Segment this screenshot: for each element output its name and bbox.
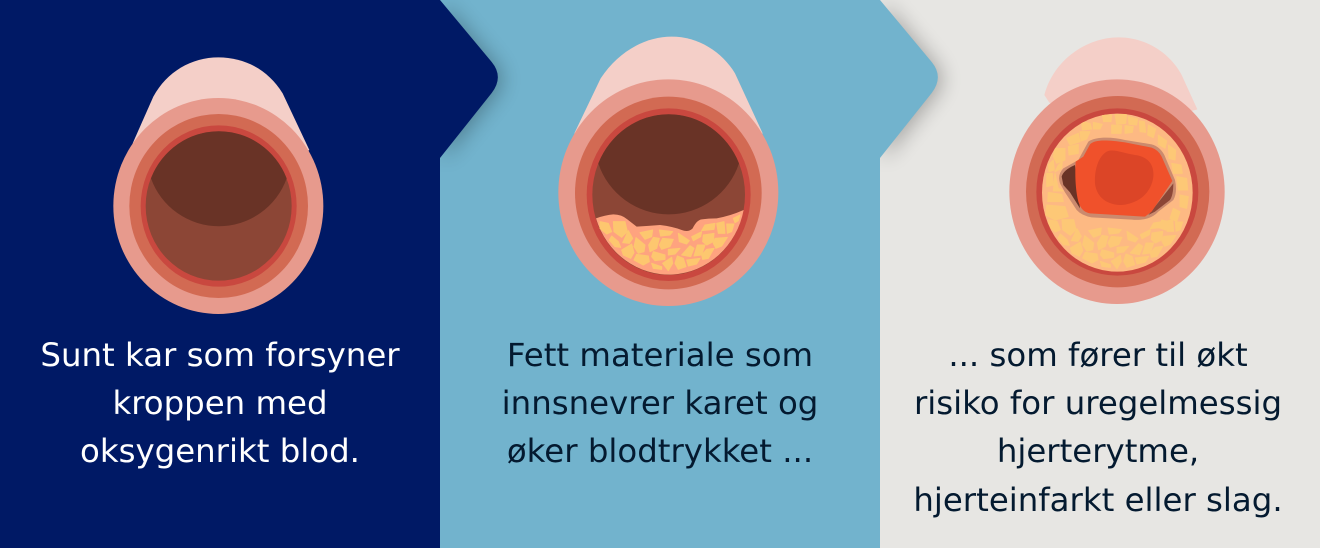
icon: healthy vessel <box>113 57 323 314</box>
text: fatty material caption: innsnevrer karet og <box>502 384 818 422</box>
text: risk caption: hjerterytme, <box>997 432 1199 470</box>
text: fatty material caption <box>502 336 818 470</box>
text: healthy vessel caption: Sunt kar som forsyner <box>40 336 400 374</box>
text: healthy vessel caption: kroppen med <box>112 384 328 422</box>
shadow of blue arrow <box>884 2 942 160</box>
panel: navy arrow <box>0 0 498 548</box>
panel: blue arrow <box>440 0 938 548</box>
text: risk caption: risiko for uregelmessig <box>914 384 1282 422</box>
text: risk caption: ... som fører til økt <box>948 336 1248 374</box>
shadow of navy arrow <box>444 2 502 160</box>
panel: grey background <box>880 0 1320 548</box>
icon: vessel blocked by clot <box>1009 37 1225 304</box>
clot <box>1059 138 1176 220</box>
text: fatty material caption: øker blodtrykket ... <box>507 432 813 470</box>
text: risk caption <box>913 336 1283 519</box>
text: risk caption: hjerteinfarkt eller slag. <box>913 481 1283 519</box>
icon: narrowed vessel with fatty plaque <box>558 37 778 306</box>
text: healthy vessel caption: oksygenrikt blod. <box>80 432 360 470</box>
text: healthy vessel caption <box>40 336 400 470</box>
text: fatty material caption: Fett materiale som <box>507 336 813 374</box>
